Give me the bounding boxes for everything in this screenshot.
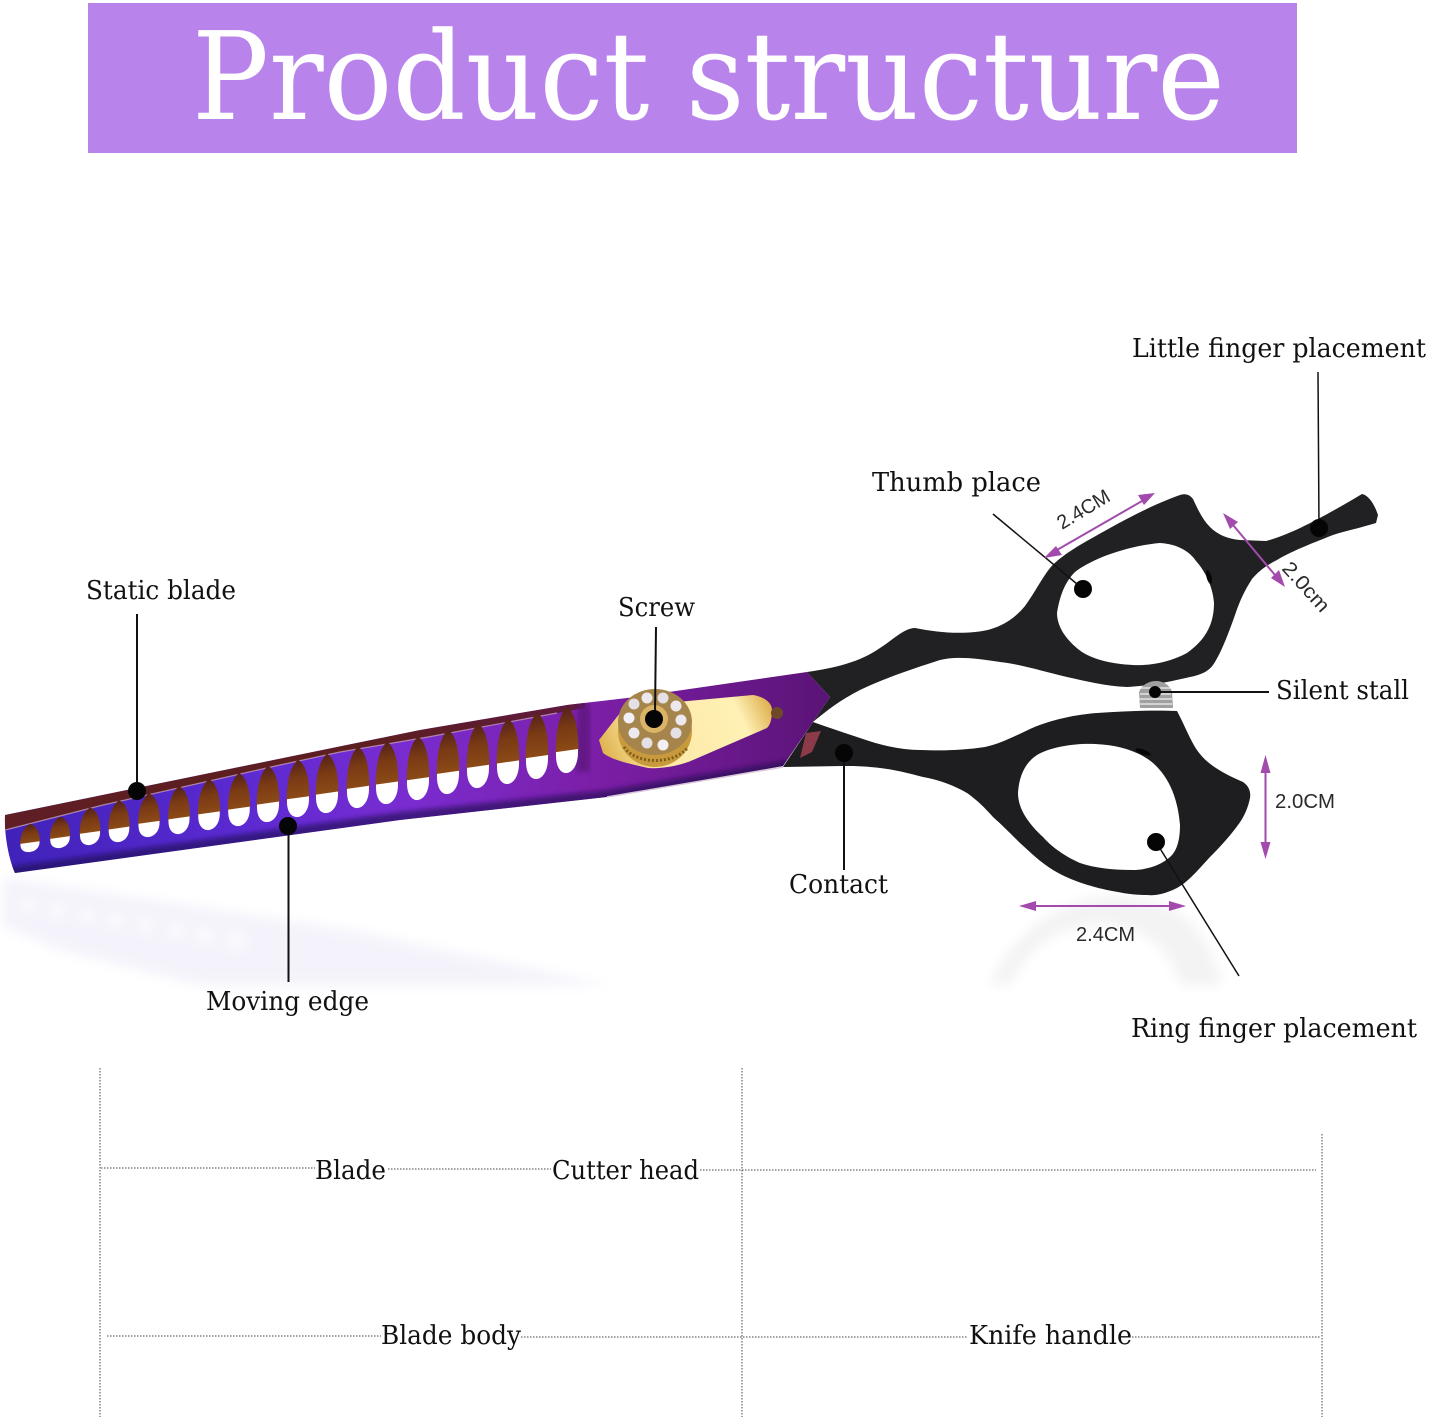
- callout: screw: [618, 593, 695, 728]
- callout: thumb place: [872, 468, 1092, 598]
- dimension: neck width 2.0cm: [1223, 513, 1334, 617]
- callout: silent stall: Silent stall: [1276, 676, 1409, 706]
- dimension: neck width 2.0cm: 2.0cm: [1277, 558, 1334, 617]
- zone label: blade: Blade: [315, 1156, 386, 1186]
- callout: ring finger placement: [1131, 833, 1418, 1044]
- dimension: ring height 2.0CM: 2.0CM: [1275, 791, 1335, 813]
- upper handle: thumb ring and little finger rest: [807, 494, 1378, 722]
- zone label: knife handle: Knife handle: [969, 1321, 1132, 1351]
- title banner: Product structure: [192, 6, 1225, 148]
- callout: ring finger placement: Ring finger placement: [1131, 1014, 1418, 1044]
- callout: moving edge: [206, 817, 369, 1017]
- callout: silent stall: [1149, 676, 1409, 706]
- dimension: ring height 2.0CM: [1260, 755, 1335, 859]
- callout: moving edge: Moving edge: [206, 987, 369, 1017]
- zone label: blade body: Blade body: [381, 1321, 521, 1351]
- callout: little finger placement: [1132, 334, 1427, 537]
- callout: screw: Screw: [618, 593, 695, 623]
- dimension: ring width 2.4CM: [1019, 901, 1186, 946]
- gold plate: [599, 695, 772, 768]
- zone divider lines: [100, 1068, 1322, 1417]
- plate rivet: [771, 707, 783, 719]
- dimension: thumb ring width 2.4CM: [1044, 486, 1155, 558]
- dimension: thumb ring width 2.4CM: 2.4CM: [1053, 486, 1114, 534]
- scissors: [0, 494, 1378, 895]
- zone label: cutter head: Cutter head: [552, 1156, 699, 1186]
- callout: contact: Contact: [789, 870, 889, 900]
- callout: contact: [789, 744, 889, 900]
- blade reflection: [2, 878, 610, 985]
- upper ring finger hole mark: [1205, 570, 1213, 584]
- silent stall bumper: [1139, 681, 1173, 708]
- blade shading: [0, 701, 790, 885]
- lower handle: ring finger loop: [783, 711, 1250, 895]
- dimension: ring width 2.4CM: 2.4CM: [1076, 924, 1135, 946]
- callout: thumb place: Thumb place: [872, 468, 1041, 498]
- jewelled screw: [618, 689, 692, 767]
- callout: static blade: [86, 576, 236, 800]
- lower handle hole mark: [1135, 747, 1151, 757]
- blade teeth: [20, 705, 578, 853]
- blade underside highlight: [607, 767, 783, 797]
- blade body: [5, 672, 830, 873]
- callout: static blade: Static blade: [86, 576, 236, 606]
- red contact reflection: [800, 731, 821, 758]
- handle reflection: [990, 896, 1222, 985]
- callout: little finger placement: Little finger placement: [1132, 334, 1427, 364]
